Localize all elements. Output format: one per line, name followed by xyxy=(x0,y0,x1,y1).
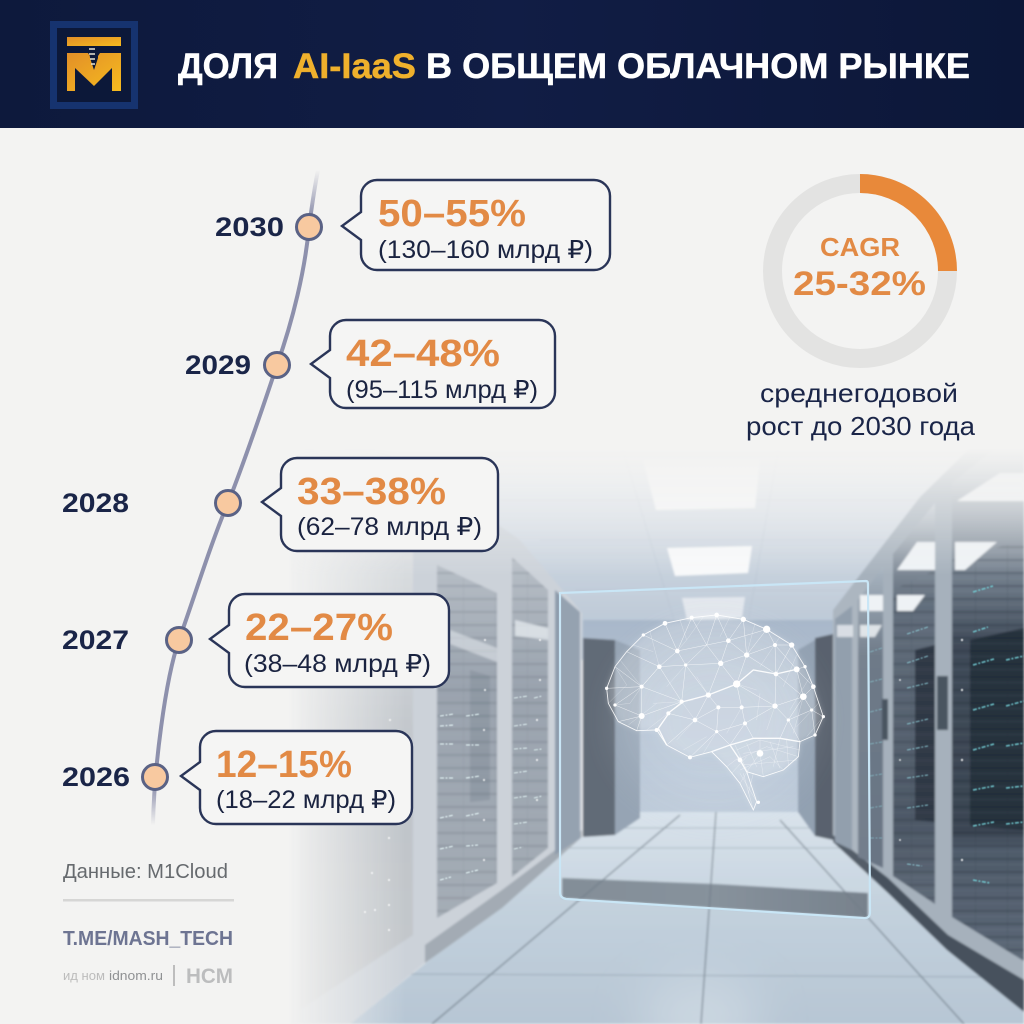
footer logos xyxy=(63,965,233,988)
back wall xyxy=(583,620,833,815)
CAGR caption: среднегодовой xyxy=(760,378,958,408)
timeline item 2029: (95–115 млрд ₽) xyxy=(346,376,538,404)
data source: Данные: M1Cloud xyxy=(63,861,228,883)
timeline item 2030: (130–160 млрд ₽) xyxy=(378,236,593,264)
footer logos: idnom.ru xyxy=(109,968,163,983)
ceiling xyxy=(499,490,920,660)
floor xyxy=(350,812,1024,1024)
timeline item 2028 xyxy=(62,458,498,551)
timeline item 2028: 33–38% xyxy=(297,471,446,513)
timeline item 2030: 2030 xyxy=(215,212,284,242)
timeline item 2027: 22–27% xyxy=(245,607,393,649)
timeline item 2026 xyxy=(62,731,412,824)
timeline item 2029 xyxy=(185,320,555,408)
timeline item 2030: 50–55% xyxy=(378,193,526,235)
footer logos: ид ном xyxy=(63,968,105,983)
CAGR donut chart: CAGR xyxy=(820,232,900,262)
title: ДОЛЯ xyxy=(178,47,278,86)
timeline item 2028: 2028 xyxy=(62,488,129,518)
brain hologram xyxy=(605,613,825,810)
timeline item 2026: 2026 xyxy=(62,762,130,792)
timeline curve xyxy=(153,170,318,825)
title: В ОБЩЕМ ОБЛАЧНОМ РЫНКЕ xyxy=(426,47,970,86)
timeline item 2028: (62–78 млрд ₽) xyxy=(297,513,482,541)
back wall haze xyxy=(610,664,819,774)
server LED lights xyxy=(440,586,1024,883)
title: AI-IaaS xyxy=(293,47,416,86)
ceiling lights xyxy=(652,488,756,620)
back server racks xyxy=(583,634,833,840)
right server racks xyxy=(831,464,1024,1012)
timeline item 2027 xyxy=(62,594,449,687)
logo xyxy=(54,24,134,106)
timeline item 2029: 2029 xyxy=(185,350,251,380)
timeline item 2027: 2027 xyxy=(62,625,129,655)
title xyxy=(178,47,970,86)
timeline item 2026: (18–22 млрд ₽) xyxy=(216,786,396,814)
left server racks xyxy=(303,552,583,1024)
header bar xyxy=(0,0,1024,128)
timeline item 2030 xyxy=(215,180,610,270)
server LED dots xyxy=(364,639,963,931)
CAGR donut chart: 25-32% xyxy=(793,265,926,303)
timeline item 2029: 42–48% xyxy=(346,333,500,375)
CAGR donut chart xyxy=(772,184,948,358)
timeline item 2027: (38–48 млрд ₽) xyxy=(244,650,431,678)
telegram link: T.ME/MASH_TECH xyxy=(63,928,233,950)
holographic glass frame xyxy=(560,581,870,918)
CAGR caption: рост до 2030 года xyxy=(746,411,976,441)
footer logos: HCM xyxy=(186,965,233,988)
data center background photo xyxy=(303,462,1024,1024)
timeline item 2026: 12–15% xyxy=(216,744,352,786)
CAGR caption xyxy=(746,378,976,441)
